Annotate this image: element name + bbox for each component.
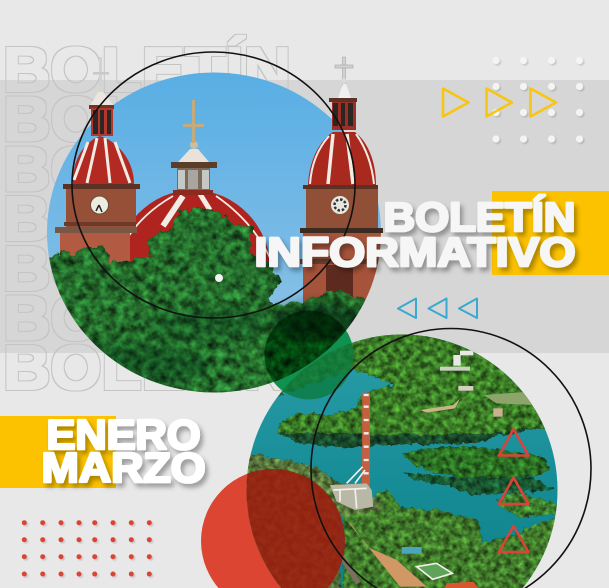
white plant structures xyxy=(330,483,373,510)
gray band xyxy=(0,80,609,353)
photo: river and island aerial view xyxy=(246,334,558,588)
title: Boletín Informativo: INFORMATIVO xyxy=(254,229,576,275)
green court xyxy=(417,563,452,579)
outlined repeated title pattern: BOLETÍN xyxy=(3,135,291,204)
outlined repeated title pattern: BOLETÍN xyxy=(3,36,291,105)
left tower lower xyxy=(60,233,130,264)
outlined repeated title pattern: BOLETÍN xyxy=(3,235,291,304)
photo: church xyxy=(40,70,385,400)
pylon tower xyxy=(362,393,370,488)
green overlay on church xyxy=(264,310,346,382)
red accent circle xyxy=(201,469,345,588)
date: Enero Marzo: MARZO xyxy=(42,444,206,491)
outlined repeated title pattern: BOLETÍN xyxy=(3,185,291,254)
center dome xyxy=(130,100,269,262)
yellow title block xyxy=(492,191,609,275)
tree canopy xyxy=(49,207,365,392)
yellow right-pointing triangles xyxy=(443,88,556,116)
blue building xyxy=(402,547,422,554)
white dot grid xyxy=(492,57,583,143)
outlined repeated title pattern: BOLETÍN xyxy=(3,334,291,403)
red dot grid xyxy=(22,520,152,576)
red overlay on river xyxy=(246,469,345,588)
green accent circle xyxy=(264,310,354,400)
date: Enero Marzo xyxy=(42,411,206,491)
outlined repeated title pattern xyxy=(3,36,291,403)
outlined repeated title pattern: BOLETÍN xyxy=(3,284,291,354)
yellow date block xyxy=(0,416,116,488)
outlined repeated title pattern: BOLETÍN xyxy=(3,86,291,155)
orange dirt road xyxy=(347,520,427,587)
black ring: top xyxy=(72,52,355,318)
red warning triangles xyxy=(499,429,528,552)
blue left-pointing triangles xyxy=(398,298,477,318)
title: Boletín Informativo xyxy=(254,194,576,275)
left tower xyxy=(55,57,140,233)
black ring: bottom xyxy=(311,328,591,588)
land and reflections xyxy=(240,327,560,588)
date: Enero Marzo: ENERO xyxy=(46,411,200,458)
title: Boletín Informativo: BOLETÍN xyxy=(384,194,576,240)
dome spot among trees xyxy=(215,274,223,282)
right tower xyxy=(300,57,383,233)
right tower lower xyxy=(300,233,381,303)
fields and buildings on the far shore xyxy=(420,398,460,413)
green overlay on river xyxy=(282,343,354,400)
